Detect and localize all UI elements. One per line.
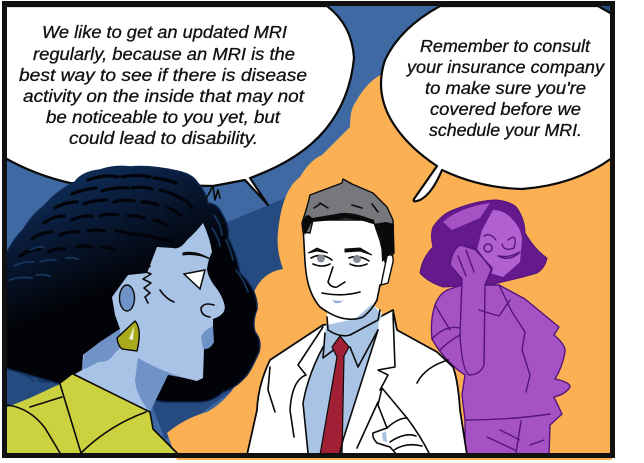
body [431,285,570,455]
tie [320,336,349,455]
earring [117,321,139,351]
bubble text: your insurance company [406,57,605,77]
hand [373,388,430,455]
face [477,210,522,277]
bubble text: best way to see if there is disease [19,65,307,85]
bubble text: could lead to disability. [69,128,258,148]
speech bubble: insurance [381,6,612,201]
woman in foreground [5,166,260,455]
navy hair highlights [10,215,248,382]
speech bubble: MRI [5,6,354,205]
chin line [320,300,377,319]
eyebrow [183,252,212,260]
dark hair shading [302,213,394,262]
shirt [303,310,380,455]
arm and hand [450,245,492,375]
jacket [5,374,177,455]
hair shadow on neck [82,329,122,370]
woman on phone [420,200,570,455]
stray curls [205,186,220,200]
finger lines [387,418,422,450]
curl lines [143,266,174,303]
nose [201,304,214,317]
jacket lines [268,313,448,453]
eye [184,270,205,289]
hair strands [314,203,378,212]
facial features [484,235,520,258]
bubble text: be noticeable to you yet, but [46,107,281,127]
face [303,218,393,319]
hair [420,200,547,287]
bubble text: We like to get an updated MRI [42,22,287,42]
neck [327,304,382,335]
bubble text: to make sure you're [425,78,586,98]
neck shadow [327,304,382,335]
eyebrows [308,248,372,255]
hair [302,179,394,262]
eyes [311,254,369,266]
ear [381,255,393,285]
bubble text [19,22,307,148]
ear [120,285,134,311]
jacket [247,310,467,455]
bubble text: covered before we [430,99,581,119]
hair [5,166,260,402]
neck shadow [135,358,197,412]
face and neck [75,223,225,412]
bubble text: Remember to consult [420,36,591,56]
shirt lines [432,285,550,453]
black hair curls [20,176,192,256]
nose and mouth [322,267,360,295]
hair highlight [443,203,490,230]
bubble text: activity on the inside that may not [23,86,305,106]
collar [323,310,380,367]
phone [458,246,492,285]
lips [201,326,214,349]
jacket lines [7,374,177,453]
bubble text: schedule your MRI. [429,120,582,140]
doctor [247,179,467,455]
bubble text [406,36,605,140]
bubble text: regularly, because an MRI is the [33,44,295,64]
